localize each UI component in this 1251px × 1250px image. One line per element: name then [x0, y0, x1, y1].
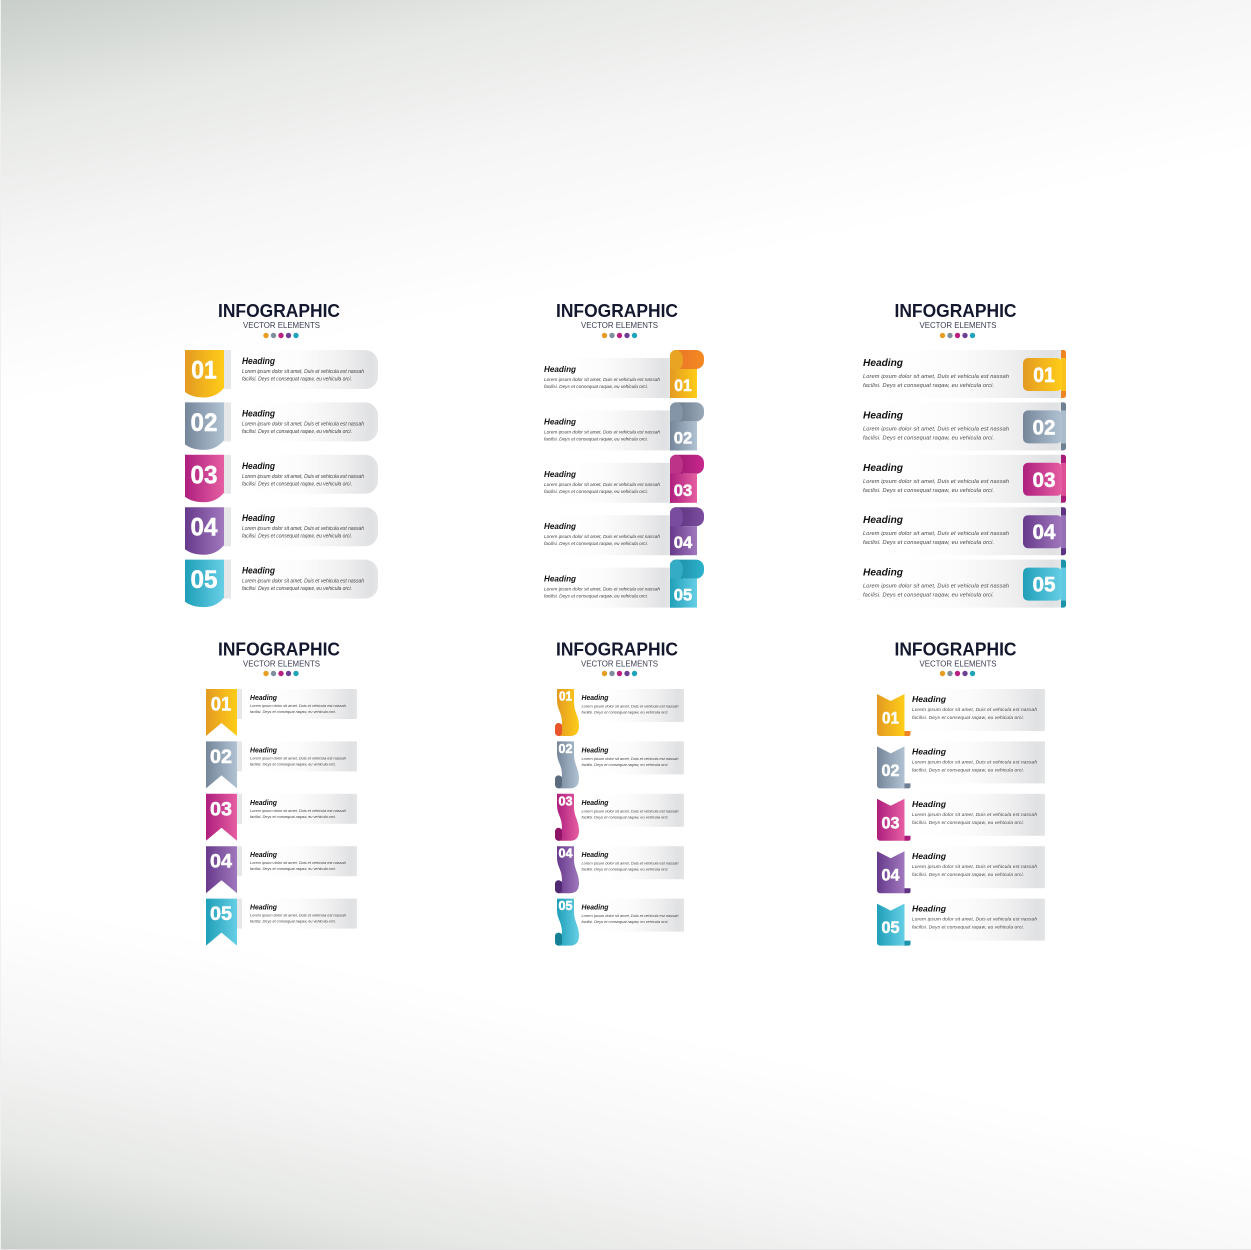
item 03: Heading	[544, 469, 577, 479]
item 02: 02	[558, 742, 573, 756]
panel: bottom-left cards with notched ribbons	[206, 638, 357, 946]
item 04: facilisi. Deys et consequat raqaw, eu vehicula orci.	[544, 541, 648, 547]
title: VECTOR ELEMENTS	[920, 658, 997, 668]
item 01	[540, 350, 704, 398]
item 03: facilisi. Deys et consequat raqaw, eu vehicula orci.	[242, 481, 352, 487]
item 05: facilisi. Deys et consequat raqaw, eu vehicula orci.	[912, 925, 1024, 931]
item 04: Heading	[250, 852, 278, 859]
item 01: Heading	[912, 694, 947, 704]
item 05: facilisi. Deys et consequat raqaw, eu vehicula orci.	[863, 593, 994, 599]
item 04: Lorem ipsum dolor sit amet, Duis et vehicula est nassah	[863, 531, 1009, 537]
item 05: 05	[674, 587, 692, 605]
title: INFOGRAPHIC	[218, 638, 340, 660]
item 05: 05	[1032, 573, 1056, 597]
item 05: Lorem ipsum dolor sit amet, Duis et vehicula est nassah	[912, 917, 1037, 923]
item 03: Lorem ipsum dolor sit amet, Duis et vehicula est nassah	[863, 479, 1009, 485]
item 03: Heading	[250, 800, 278, 807]
item 04: Lorem ipsum dolor sit amet, Duis et vehicula est nassah	[250, 860, 347, 865]
item 02	[877, 741, 1045, 788]
item 03: facilisi. Deys et consequat raqaw, eu vehicula orci.	[582, 814, 668, 819]
item 01: 01	[882, 710, 899, 728]
title: VECTOR ELEMENTS	[920, 320, 997, 330]
item 03: 03	[882, 814, 900, 832]
item 02: 02	[674, 429, 692, 447]
item 03: Lorem ipsum dolor sit amet, Duis et vehicula est nassah	[250, 808, 347, 813]
item 01: 01	[559, 690, 572, 704]
item 05: Lorem ipsum dolor sit amet, Duis et vehicula est nassah	[863, 584, 1009, 590]
title	[894, 300, 1016, 330]
item 03: Heading	[912, 799, 947, 809]
item 02: 02	[190, 409, 218, 437]
item 05: 05	[882, 919, 900, 937]
item 05: 05	[210, 903, 232, 925]
item 05: Lorem ipsum dolor sit amet, Duis et vehicula est nassah	[250, 913, 347, 918]
item 03: facilisi. Deys et consequat raqaw, eu vehicula orci.	[250, 814, 336, 819]
item 05: facilisi. Deys et consequat raqaw, eu vehicula orci.	[544, 594, 648, 600]
item 01: facilisi. Deys et consequat raqaw, eu vehicula orci.	[863, 383, 994, 389]
panel: top-left rounded cards with shield tabs	[185, 300, 378, 607]
item 04: Lorem ipsum dolor sit amet, Duis et vehicula est nassah	[582, 861, 679, 866]
item 02	[206, 741, 357, 788]
item 03	[855, 455, 1066, 503]
item 04: Heading	[242, 513, 275, 523]
item 05: Lorem ipsum dolor sit amet, Duis et vehicula est nassah	[242, 579, 364, 585]
item 01: 01	[191, 356, 217, 384]
item 03	[555, 794, 684, 841]
item 03	[185, 455, 378, 502]
item 04: 04	[1032, 520, 1056, 544]
item 02: Heading	[912, 746, 947, 756]
title	[218, 638, 340, 668]
item 05: Heading	[242, 566, 275, 576]
item 01: 01	[211, 694, 231, 716]
item 02: Lorem ipsum dolor sit amet, Duis et vehicula est nassah	[912, 759, 1037, 765]
item 01	[877, 689, 1045, 736]
item 02: facilisi. Deys et consequat raqaw, eu vehicula orci.	[544, 436, 648, 442]
item 04: Heading	[544, 521, 577, 531]
item 01: Lorem ipsum dolor sit amet, Duis et vehicula est nassah	[863, 374, 1009, 380]
item 02: Lorem ipsum dolor sit amet, Duis et vehicula est nassah	[250, 755, 347, 760]
item 04	[206, 846, 357, 893]
title: INFOGRAPHIC	[556, 300, 678, 321]
item 03: 03	[210, 798, 232, 820]
item 01: Lorem ipsum dolor sit amet, Duis et vehicula est nassah	[544, 377, 660, 383]
item 03: facilisi. Deys et consequat raqaw, eu vehicula orci.	[544, 489, 648, 495]
colour dots	[263, 333, 299, 338]
item 05	[206, 899, 357, 946]
item 02: Heading	[242, 408, 275, 418]
item 02: 02	[882, 762, 900, 780]
item 01: facilisi. Deys et consequat raqaw, eu vehicula orci.	[582, 710, 668, 714]
item 01	[185, 350, 378, 398]
item 03	[540, 455, 704, 503]
item 04: facilisi. Deys et consequat raqaw, eu vehicula orci.	[250, 866, 336, 871]
item 04: Heading	[863, 514, 904, 526]
item 03: facilisi. Deys et consequat raqaw, eu vehicula orci.	[912, 820, 1024, 826]
item 05	[855, 560, 1066, 608]
item 03	[206, 794, 357, 841]
colour dots	[602, 671, 637, 676]
item 02: Lorem ipsum dolor sit amet, Duis et vehicula est nassah	[242, 421, 364, 427]
item 01: Lorem ipsum dolor sit amet, Duis et vehicula est nassah	[242, 369, 364, 375]
item 02: facilisi. Deys et consequat raqaw, eu vehicula orci.	[250, 761, 336, 766]
item 01: Lorem ipsum dolor sit amet, Duis et vehicula est nassah	[250, 703, 347, 708]
item 03: Lorem ipsum dolor sit amet, Duis et vehicula est nassah	[912, 812, 1037, 818]
item 02: 02	[1032, 415, 1056, 439]
item 04: 04	[210, 851, 232, 873]
item 03: facilisi. Deys et consequat raqaw, eu vehicula orci.	[863, 488, 994, 494]
title: VECTOR ELEMENTS	[243, 658, 320, 668]
item 05: Heading	[912, 904, 947, 914]
item 05: Lorem ipsum dolor sit amet, Duis et vehicula est nassah	[544, 587, 660, 593]
item 05: facilisi. Deys et consequat raqaw, eu vehicula orci.	[250, 919, 336, 924]
item 05: Heading	[582, 905, 609, 912]
item 04: Lorem ipsum dolor sit amet, Duis et vehicula est nassah	[242, 526, 364, 532]
item 01: 01	[1033, 363, 1055, 387]
item 05: Heading	[250, 905, 278, 912]
item 02	[855, 402, 1066, 450]
item 02: facilisi. Deys et consequat raqaw, eu vehicula orci.	[242, 429, 352, 435]
item 02: facilisi. Deys et consequat raqaw, eu vehicula orci.	[582, 762, 668, 767]
item 03: 03	[558, 794, 573, 808]
title: VECTOR ELEMENTS	[243, 320, 320, 330]
item 01: Heading	[544, 364, 577, 374]
item 05: Heading	[544, 574, 577, 584]
item 02: facilisi. Deys et consequat raqaw, eu vehicula orci.	[863, 435, 994, 441]
item 01: Heading	[582, 695, 609, 702]
item 01: Heading	[250, 695, 278, 702]
colour dots	[602, 333, 637, 338]
colour dots	[940, 671, 975, 676]
item 04: 04	[558, 847, 573, 861]
item 04	[855, 507, 1066, 555]
title	[218, 300, 340, 330]
colour dots	[940, 333, 975, 338]
item 05	[540, 560, 704, 608]
item 03: Heading	[863, 462, 904, 474]
title: INFOGRAPHIC	[556, 638, 678, 660]
item 04: facilisi. Deys et consequat raqaw, eu vehicula orci.	[863, 540, 994, 546]
item 02: Heading	[863, 409, 904, 421]
title	[894, 638, 1016, 668]
item 04: 04	[674, 534, 693, 552]
item 01	[855, 350, 1066, 398]
item 05	[877, 899, 1045, 946]
panel: top-right cards with rounded number badges	[855, 300, 1066, 608]
item 05: Lorem ipsum dolor sit amet, Duis et vehicula est nassah	[582, 913, 679, 918]
item 05: 05	[190, 566, 218, 594]
item 05: 05	[558, 899, 573, 913]
title: INFOGRAPHIC	[894, 638, 1016, 660]
item 01: facilisi. Deys et consequat raqaw, eu vehicula orci.	[544, 384, 648, 390]
item 04: Heading	[912, 851, 947, 861]
item 02	[540, 402, 704, 450]
item 03: Heading	[242, 461, 275, 471]
item 03: 03	[190, 461, 218, 489]
item 03: Lorem ipsum dolor sit amet, Duis et vehicula est nassah	[242, 474, 364, 480]
title: VECTOR ELEMENTS	[581, 658, 658, 668]
item 02: facilisi. Deys et consequat raqaw, eu vehicula orci.	[912, 767, 1024, 773]
item 01: Lorem ipsum dolor sit amet, Duis et vehicula est nassah	[582, 704, 679, 708]
item 01	[206, 689, 357, 736]
item 02	[555, 741, 684, 788]
item 03	[877, 794, 1045, 841]
item 02: Heading	[582, 747, 609, 754]
item 03: 03	[1032, 468, 1056, 492]
item 01	[555, 689, 684, 736]
panel: bottom-right cards with V-notch tabs	[877, 638, 1045, 946]
item 03: Lorem ipsum dolor sit amet, Duis et vehicula est nassah	[544, 482, 660, 488]
item 04	[185, 507, 378, 555]
item 02: Lorem ipsum dolor sit amet, Duis et vehicula est nassah	[544, 429, 660, 435]
item 04	[555, 846, 684, 893]
item 04: 04	[882, 867, 900, 885]
item 01: Heading	[863, 357, 904, 369]
item 02: 02	[210, 746, 232, 768]
item 02: Heading	[250, 747, 278, 754]
item 04: facilisi. Deys et consequat raqaw, eu vehicula orci.	[242, 534, 352, 540]
item 02: Lorem ipsum dolor sit amet, Duis et vehicula est nassah	[582, 756, 679, 761]
item 04: facilisi. Deys et consequat raqaw, eu vehicula orci.	[912, 872, 1024, 878]
item 04: 04	[190, 514, 218, 542]
item 04: Lorem ipsum dolor sit amet, Duis et vehicula est nassah	[544, 534, 660, 540]
item 01: facilisi. Deys et consequat raqaw, eu vehicula orci.	[250, 709, 336, 714]
item 01: Heading	[242, 356, 275, 366]
title: INFOGRAPHIC	[218, 300, 340, 321]
panel: bottom-middle cards with scroll tabs	[555, 638, 684, 946]
item 05: facilisi. Deys et consequat raqaw, eu vehicula orci.	[582, 919, 668, 924]
item 01: 01	[674, 377, 692, 395]
item 01: facilisi. Deys et consequat raqaw, eu vehicula orci.	[242, 376, 352, 382]
title: INFOGRAPHIC	[894, 300, 1016, 321]
title: VECTOR ELEMENTS	[581, 320, 658, 330]
item 04: Lorem ipsum dolor sit amet, Duis et vehicula est nassah	[912, 864, 1037, 870]
colour dots	[263, 671, 299, 676]
item 02: Lorem ipsum dolor sit amet, Duis et vehicula est nassah	[863, 426, 1009, 432]
item 01: Lorem ipsum dolor sit amet, Duis et vehicula est nassah	[912, 707, 1037, 713]
panel: top-middle cards with rolled tabs	[540, 300, 704, 608]
item 03: Heading	[582, 800, 609, 807]
title	[556, 638, 678, 668]
item 03: Lorem ipsum dolor sit amet, Duis et vehicula est nassah	[582, 808, 679, 813]
item 04: facilisi. Deys et consequat raqaw, eu vehicula orci.	[582, 867, 668, 872]
item 05: Heading	[863, 567, 904, 579]
item 05: facilisi. Deys et consequat raqaw, eu vehicula orci.	[242, 586, 352, 592]
item 01: facilisi. Deys et consequat raqaw, eu vehicula orci.	[912, 715, 1024, 721]
title	[556, 300, 678, 330]
item 02: Heading	[544, 416, 577, 426]
item 02	[185, 402, 378, 450]
item 04: Heading	[582, 852, 609, 859]
item 05	[555, 899, 684, 946]
item 03: 03	[674, 482, 692, 500]
item 05	[185, 560, 378, 607]
item 04	[877, 846, 1045, 893]
item 04	[540, 507, 704, 555]
